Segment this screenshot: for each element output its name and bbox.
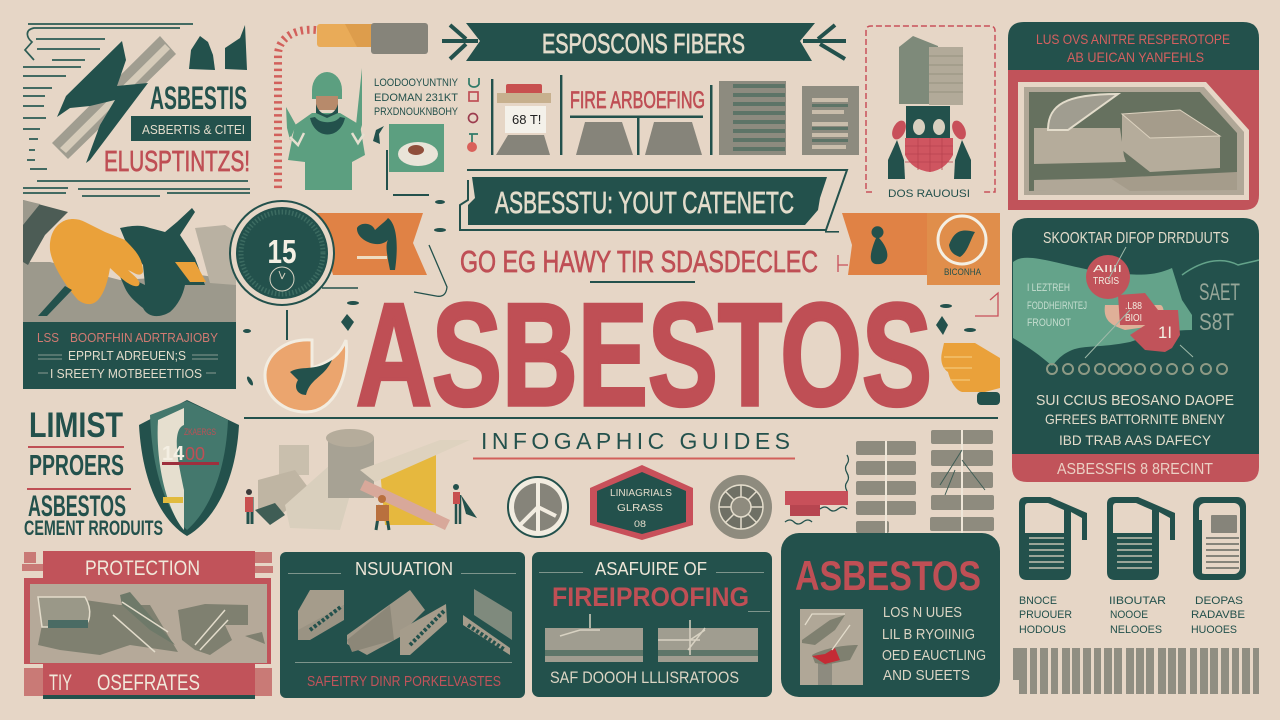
label banner	[131, 116, 251, 141]
text: panel heading: LUS OVS ANITRE RESPEROTOPE	[1036, 31, 1230, 47]
panel: asbestos summary	[781, 533, 1000, 697]
text: body: AND SUEETS	[883, 667, 970, 684]
text: safety callout: SAET	[1199, 279, 1240, 306]
ribbon: orange left	[317, 213, 427, 275]
chart: map blob with markers: BIOI	[1125, 313, 1142, 324]
text: panel body: SUI CCIUS BEOSANO DAOPE	[1036, 392, 1234, 409]
heading: limit: PPROERS	[29, 450, 124, 482]
heading: limit: ASBESTOS	[28, 490, 126, 523]
dots row	[1047, 364, 1227, 374]
text: captions one: IIBOUTAR	[1109, 595, 1166, 607]
chart: map blob with markers: FROUNOT	[1027, 317, 1071, 329]
banner: asbestos content: ASBESSTU: YOUT CATENETC	[495, 185, 794, 220]
ribbon: orange right	[842, 213, 1000, 285]
chart: gray barcode strip	[1013, 648, 1259, 694]
text: safety callout: S8T	[1199, 309, 1234, 336]
heading: NSUUATION	[355, 559, 453, 579]
text: panel body: IBD TRAB AAS DAFECY	[1059, 432, 1212, 448]
caption: DOS RAUOUSI	[888, 188, 970, 200]
illustration: insulation pieces	[298, 589, 512, 655]
icons: small column of symbols	[467, 78, 479, 152]
footer: SAFEITRY DINR PORKELVASTES	[307, 673, 501, 690]
badge: 15 dial: 15	[268, 233, 296, 270]
icon: worker in green protective suit	[286, 68, 365, 190]
panel: protection	[22, 551, 273, 699]
ribbon: orange right: BICONHA	[944, 267, 981, 277]
heading: fire proofing: FIRE ARBOEFING	[570, 87, 705, 114]
footer: SAF DOOOH LLLISRATOOS	[550, 668, 739, 687]
heading: red: FIREIPROOFING	[552, 582, 749, 612]
subheading: red: ELUSPTINTZS!	[104, 146, 250, 178]
illustration: asbestos boxes	[1018, 82, 1249, 200]
text: panel heading	[1036, 31, 1230, 65]
chart: map blob with markers	[1013, 247, 1259, 366]
heading: limit: CEMENT RRODUITS	[24, 517, 163, 540]
icons: clipboard products	[1019, 497, 1246, 636]
badge: hexagon: 08	[634, 519, 646, 529]
panel: safety caption: BOORFHIN ADRTRAJIOBY	[70, 330, 218, 345]
heading: SKOOKTAR DIFOP DRRDUUTS	[1043, 230, 1229, 247]
panel: safety caption	[23, 322, 236, 389]
icon: respirator mask	[888, 106, 971, 179]
text: panel heading: AB UEICAN YANFEHLS	[1067, 49, 1204, 65]
text: small description: LOODOOYUNTNIY	[374, 77, 459, 89]
heading: ASAFUIRE OF	[595, 559, 707, 579]
icon: green card with oval	[373, 124, 444, 196]
icon: gray brick columns	[856, 430, 994, 533]
panel: top-left asbestos title	[23, 24, 251, 196]
text: body	[882, 604, 986, 684]
panel: insulation	[280, 552, 525, 698]
banner: asbestos content	[460, 170, 847, 230]
illustration: broken asbestos sheets	[30, 584, 267, 663]
heading: ASBESTOS	[795, 552, 981, 599]
panel: safety caption: EPPRLT ADREUEN;S	[68, 348, 186, 363]
icon: clipboard two	[1107, 497, 1175, 580]
icon: dark glove	[118, 208, 205, 316]
chart: map blob with markers: TRGIS	[1093, 276, 1119, 287]
icon: shield badge: ZKAERGS	[184, 427, 216, 437]
heading: infographic guides: INFOGAPHIC GUIDES	[481, 428, 790, 454]
badge: hexagon: GLRASS	[617, 503, 663, 514]
icon: stacked fibres	[899, 36, 963, 105]
heading: limit	[24, 406, 163, 540]
divider line under title	[244, 417, 998, 419]
icon: orange swirl circle	[265, 340, 347, 412]
text: body: LOS N UUES	[883, 604, 962, 621]
panel: handshake	[23, 200, 236, 322]
icon: two gray blocks	[570, 85, 712, 155]
banner: fibers: ESPOSCONS FIBERS	[542, 28, 745, 59]
illustration: hand with tool	[800, 609, 863, 685]
text: captions one: NOOOE	[1110, 609, 1148, 621]
title: main asbestos: ASBESTOS	[356, 273, 932, 436]
chart: map blob with markers: 1I	[1158, 323, 1172, 342]
icon: shield badge	[139, 400, 239, 536]
heading: limit: LIMIST	[29, 406, 123, 445]
label banner: ASBERTIS & CITEI	[142, 122, 245, 137]
icon: yellow hand	[941, 343, 1000, 405]
chart: map blob with markers: FODDHEIRNTEJ	[1027, 300, 1087, 312]
text: captions one: HUOOES	[1191, 624, 1237, 636]
icon: stacked sheets	[719, 81, 859, 155]
banner: fibers	[442, 23, 846, 61]
badge: hexagon: LINIAGRIALS	[610, 488, 672, 499]
text: panel body: GFREES BATTORNITE BNENY	[1045, 411, 1226, 427]
text: captions one: NELOOES	[1110, 624, 1162, 636]
heading: PROTECTION	[85, 557, 200, 580]
panel: safety caption: I SREETY MOTBEEETTIOS	[50, 366, 202, 381]
panel: dashed frame with respirator	[866, 26, 995, 200]
illustration: construction scene	[245, 429, 477, 530]
icon: cigarette with dashed curve	[278, 23, 428, 190]
heading: asbestis: ASBESTIS	[150, 80, 247, 116]
text: captions one: PRUOUER	[1019, 609, 1072, 621]
panel: top-right respirators	[1008, 22, 1259, 210]
chart: map blob with markers: AIIII	[1093, 264, 1122, 275]
subtitle: red: GO EG HAWY TIR SDASDECLEC	[460, 244, 818, 279]
chart: map blob with markers: .L88	[1125, 301, 1142, 312]
icon: fibrous asbestos rock	[52, 25, 247, 163]
icon: red bench with squiggles	[785, 455, 848, 524]
decorations around title	[243, 200, 998, 386]
text: small description: PRXDNOUKNBOHY	[374, 106, 459, 118]
footer: TIY	[49, 670, 72, 695]
text: panel body	[1036, 392, 1234, 448]
footer text: ASBESSFIS 8 8RECINT	[1057, 461, 1213, 478]
text: small description	[374, 77, 459, 118]
icon: peace circle	[508, 477, 568, 537]
icon: wheel	[710, 475, 772, 539]
panel: safety caption: LSS	[37, 330, 59, 345]
text: captions one: BNOCE	[1019, 595, 1057, 607]
icon: clipboard three	[1193, 497, 1246, 580]
illustration: beams	[545, 614, 758, 662]
text: captions one: HODOUS	[1019, 624, 1066, 636]
icon: printer device with label: 68 T!	[512, 112, 541, 127]
footer	[49, 670, 200, 695]
panel: respirator products	[1012, 218, 1259, 482]
icon: clipboard one	[1019, 497, 1087, 580]
text: body: LIL B RYOIINIG	[882, 626, 975, 643]
badge: hexagon	[590, 465, 693, 540]
text: safety callout	[1199, 279, 1240, 336]
text: small description: EDOMAN 231KT	[374, 92, 458, 104]
icon: shield badge: 00	[185, 444, 205, 464]
icon: printer device with label	[491, 75, 562, 155]
icon: shield badge: 14	[162, 443, 185, 465]
footer: OSEFRATES	[97, 670, 200, 695]
text: captions one	[1019, 595, 1245, 636]
icon: yellow glove	[50, 219, 143, 304]
text: body: OED EAUCTLING	[882, 647, 986, 664]
chart: map blob with markers: I LEZTREH	[1027, 282, 1070, 294]
panel: fireproofing	[532, 552, 772, 697]
text: captions one: RADAVBE	[1191, 609, 1245, 621]
badge: 15 dial	[230, 201, 358, 340]
text: captions one: DEOPAS	[1195, 595, 1243, 607]
